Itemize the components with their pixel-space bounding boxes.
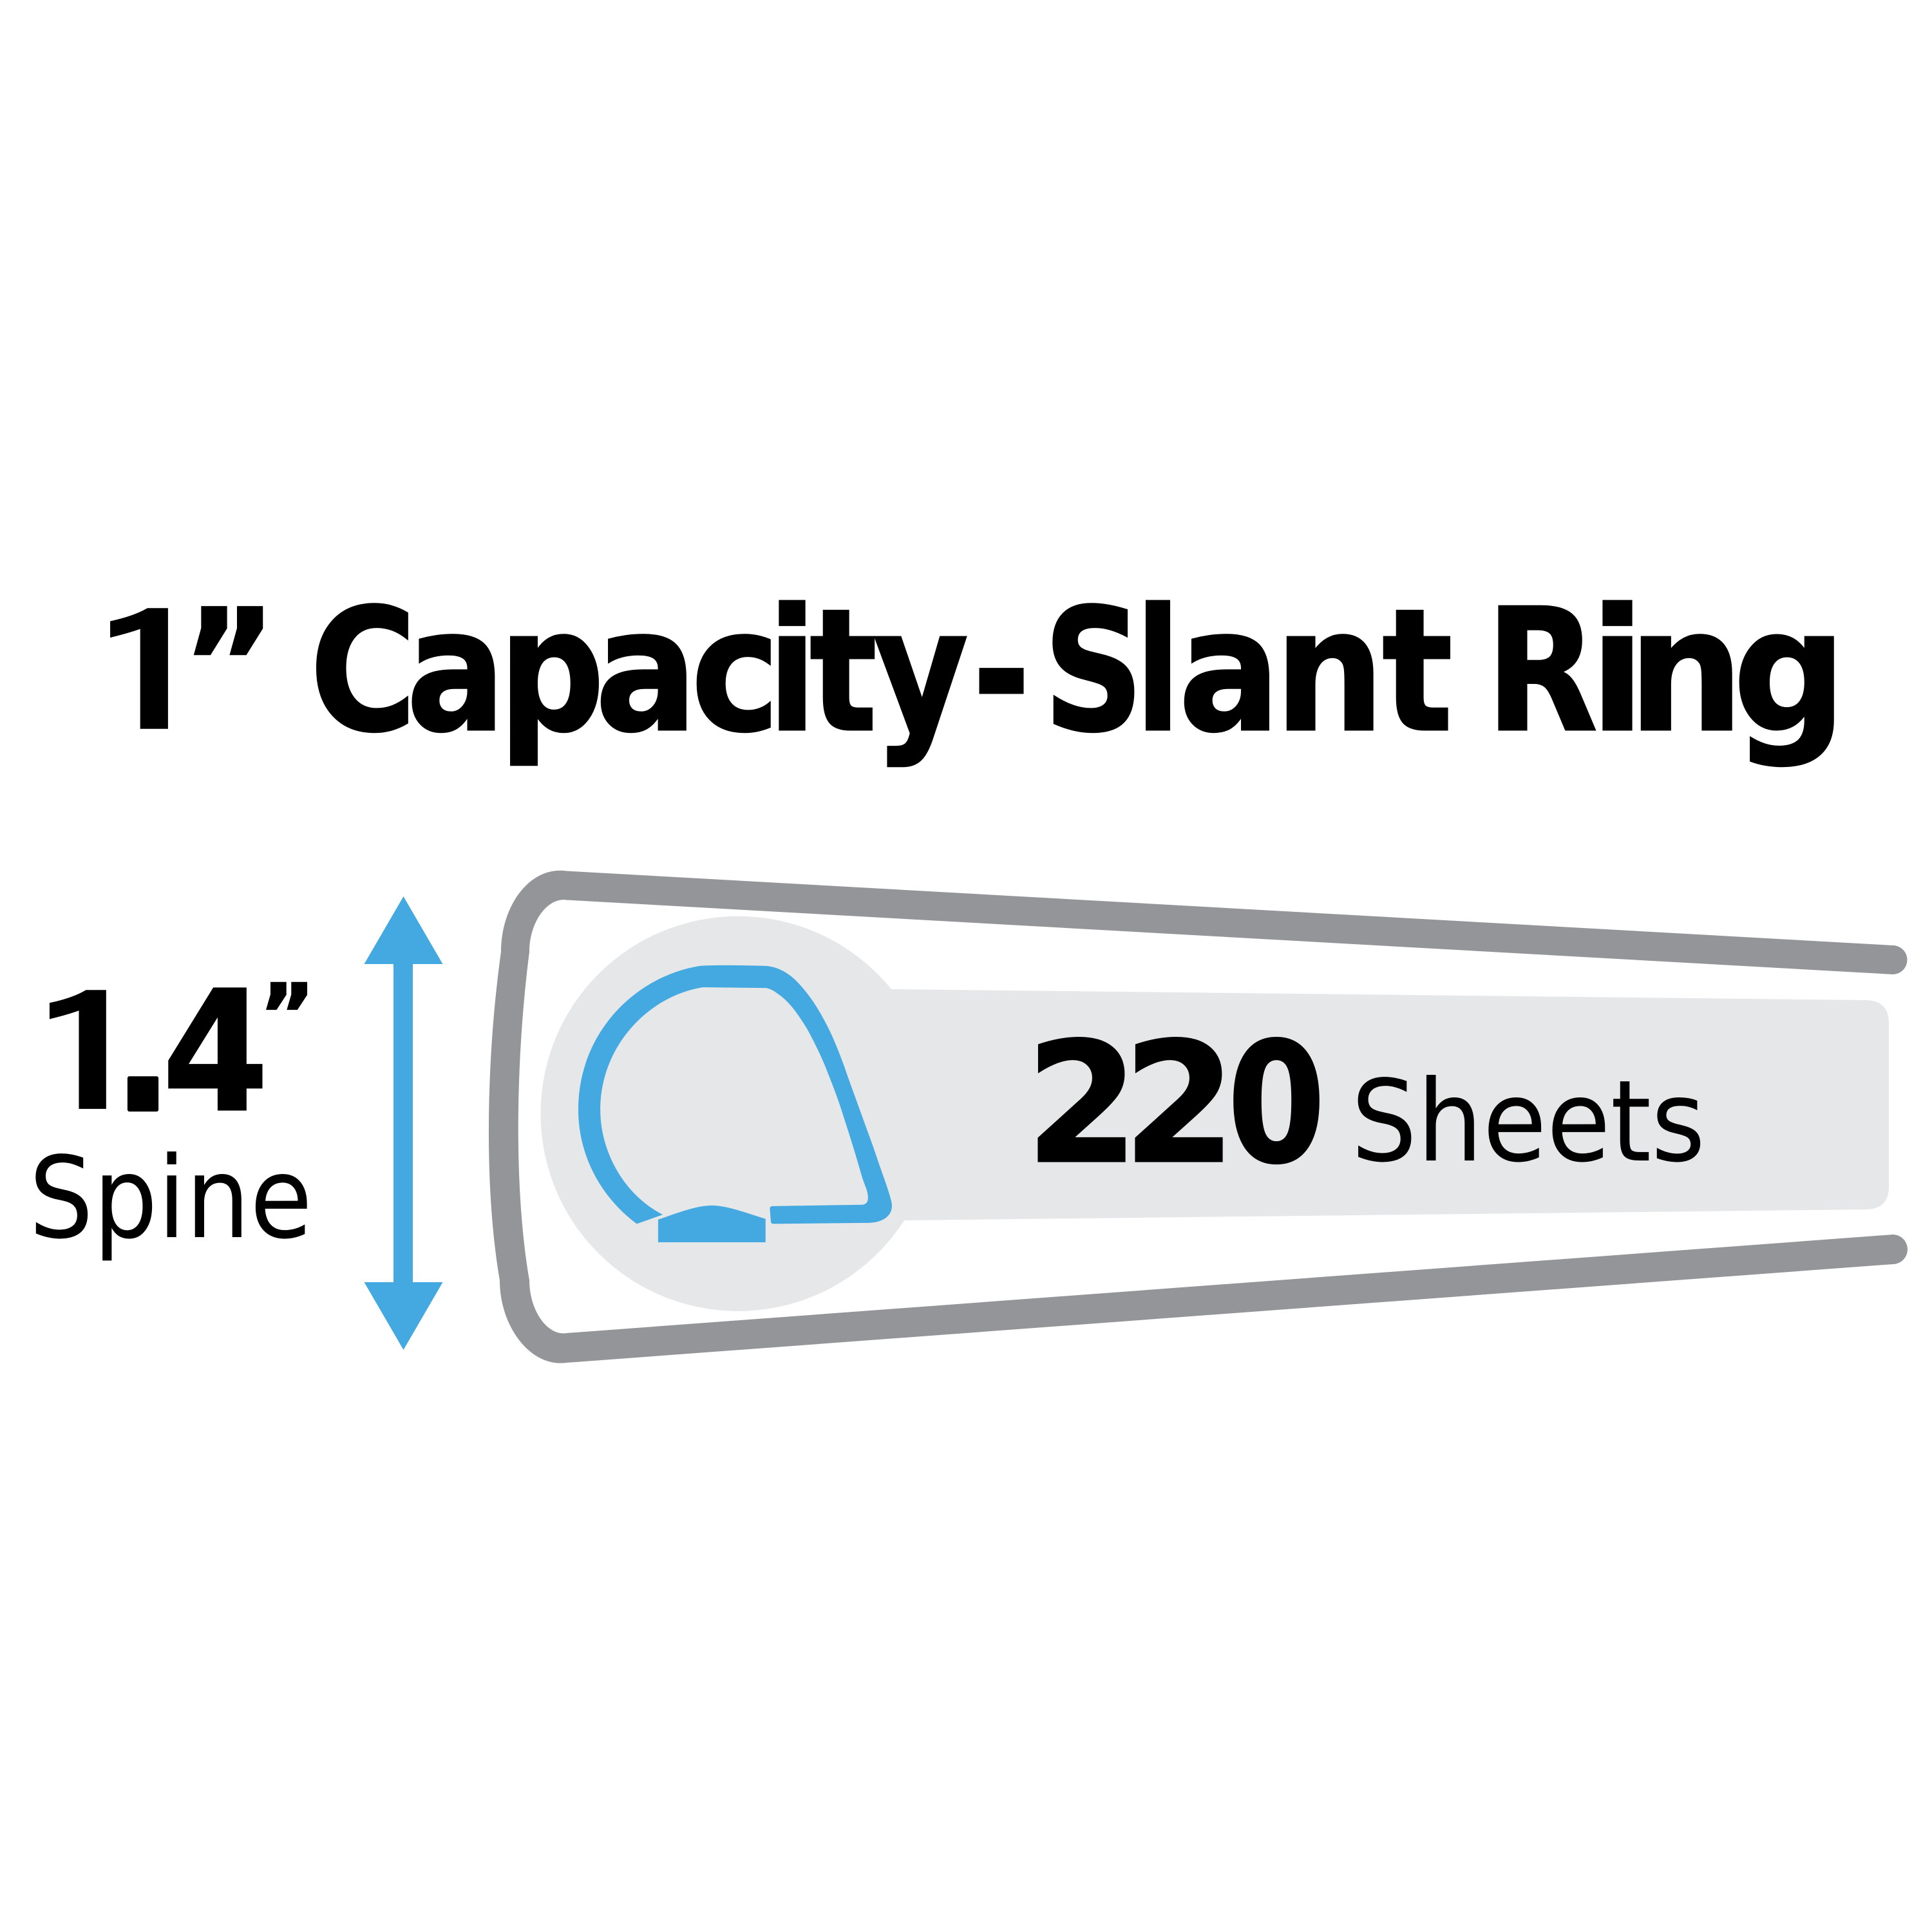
ring base bbox=[658, 1206, 766, 1242]
title: a bbox=[1179, 573, 1280, 770]
sheet count bbox=[1026, 1007, 1325, 1200]
sheet count: 2 bbox=[1123, 1007, 1236, 1200]
spine measurement: 1.4 inch: 4 bbox=[162, 956, 269, 1149]
spine measurement: 1.4 inch bbox=[19, 956, 315, 1149]
title: t bbox=[810, 573, 877, 770]
title: p bbox=[498, 573, 605, 770]
title: S bbox=[1043, 573, 1144, 770]
spine measurement: 1.4 inch: . bbox=[113, 956, 173, 1149]
title: y bbox=[873, 573, 969, 770]
sheet count: 2 bbox=[1026, 1007, 1139, 1200]
title: - bbox=[972, 573, 1030, 770]
title: c bbox=[691, 573, 780, 770]
title: R bbox=[1486, 573, 1598, 770]
title: 1 bbox=[79, 588, 222, 757]
spine measurement: 1.4 inch: ” bbox=[260, 966, 315, 1064]
title: t bbox=[1382, 573, 1453, 770]
ring arc bbox=[578, 965, 892, 1224]
spine measurement: 1.4 inch: 1 bbox=[19, 970, 158, 1136]
title: n bbox=[1628, 573, 1744, 770]
title: i bbox=[768, 573, 817, 770]
sheet count: 0 bbox=[1227, 1007, 1325, 1200]
title bbox=[79, 573, 1846, 770]
panel: capacity background bbox=[540, 916, 1889, 1311]
binder outline bbox=[489, 871, 1908, 1363]
arrow: spine height bbox=[365, 896, 443, 1350]
title: n bbox=[1274, 573, 1385, 770]
title: l bbox=[1135, 573, 1180, 770]
spine label: Spine bbox=[29, 1133, 312, 1264]
icon: slant ring bbox=[578, 965, 892, 1242]
title: i bbox=[1590, 573, 1645, 770]
title: a bbox=[406, 573, 506, 770]
title: C bbox=[310, 573, 417, 770]
sheets label: Sheets bbox=[1351, 1057, 1705, 1188]
title: g bbox=[1733, 573, 1846, 770]
title: a bbox=[595, 573, 697, 770]
title: ” bbox=[182, 578, 277, 753]
